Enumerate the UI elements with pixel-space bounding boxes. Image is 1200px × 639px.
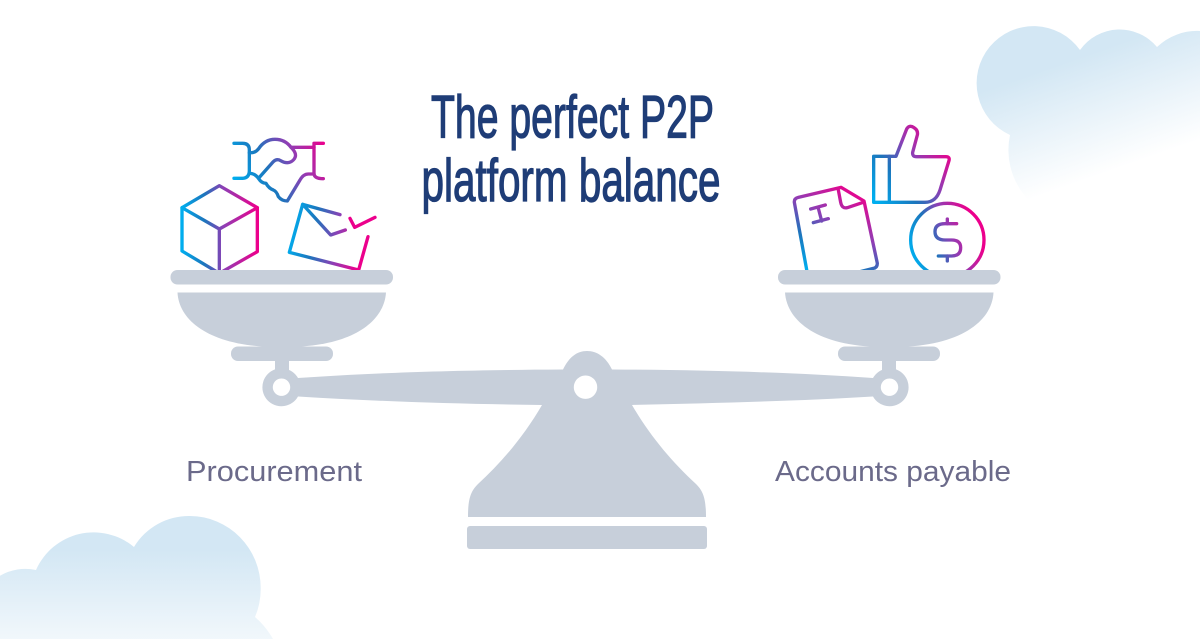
title: platform balance <box>422 147 720 214</box>
title: The perfect P2P <box>431 84 714 150</box>
beam and stand <box>262 351 909 517</box>
left pan <box>170 270 393 374</box>
cloud: top right <box>977 26 1200 222</box>
icon: thumbs up <box>874 126 949 202</box>
title <box>422 84 720 214</box>
label: accounts payable: Accounts payable <box>775 456 1011 488</box>
icon: dollar coin <box>911 203 984 277</box>
right pan <box>778 270 1000 374</box>
icon: cube <box>182 186 257 273</box>
left icons <box>182 139 375 273</box>
right icons <box>794 126 984 277</box>
icon: document <box>794 187 877 273</box>
label: procurement: Procurement <box>186 456 362 488</box>
icon: envelope with check <box>289 204 375 270</box>
balance scale <box>170 270 1000 549</box>
icon: handshake <box>234 139 323 201</box>
cloud: bottom left <box>0 516 273 639</box>
base <box>467 526 707 549</box>
